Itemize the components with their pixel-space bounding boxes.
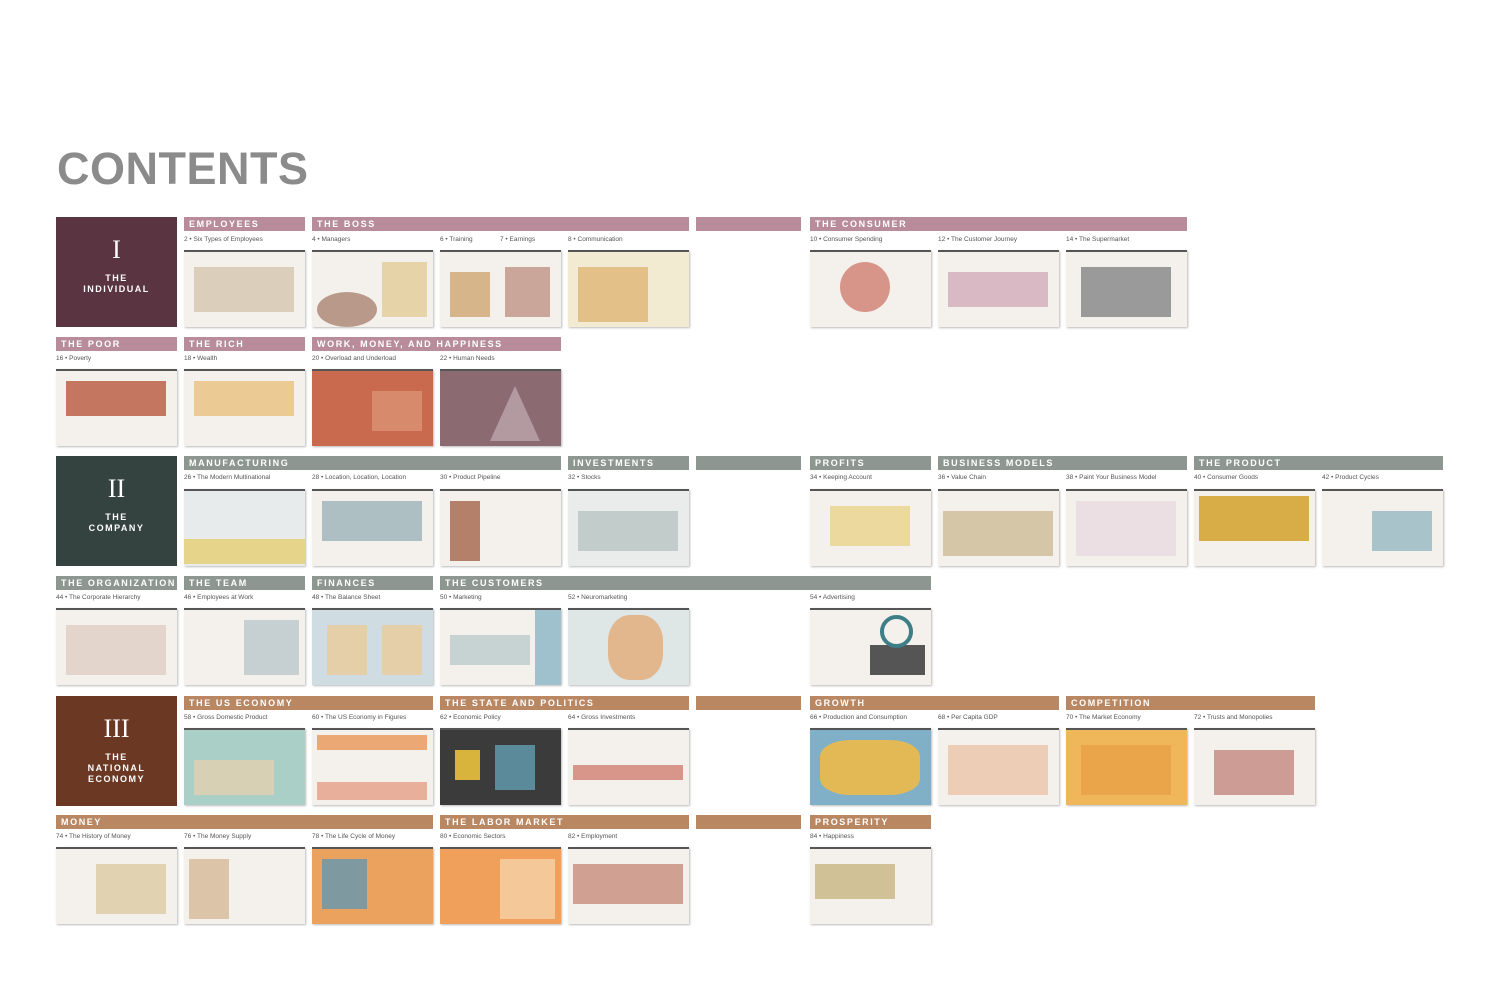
bar: investments	[568, 456, 689, 470]
bar: investments: INVESTMENTS	[573, 458, 655, 468]
section: III The National Economy	[56, 696, 177, 806]
bar: prosperity: PROSPERITY	[815, 817, 889, 827]
bar: the us economy: THE US ECONOMY	[189, 698, 293, 708]
bar: competition	[1066, 696, 1315, 710]
bar: blank	[696, 217, 801, 231]
thumbnails row 3	[184, 489, 1445, 568]
labels row 6: 78 • The Life Cycle of Money	[312, 833, 395, 840]
labels row 5: 58 • Gross Domestic Product	[184, 714, 268, 721]
labels row 3: 36 • Value Chain	[938, 474, 986, 481]
bar: the consumer	[810, 217, 1187, 231]
labels row 1: 4 • Managers	[312, 236, 350, 243]
labels row 3: 42 • Product Cycles	[1322, 474, 1379, 481]
labels row 5: 62 • Economic Policy	[440, 714, 501, 721]
bar: money	[56, 815, 433, 829]
bar: finances: FINANCES	[317, 578, 376, 588]
labels row 6	[56, 833, 854, 840]
labels row 3: 28 • Location, Location, Location	[312, 474, 406, 481]
labels row 6: 84 • Happiness	[810, 833, 854, 840]
section: III The National Economy: THE	[105, 752, 128, 762]
bar: growth: GROWTH	[815, 698, 866, 708]
section: III The National Economy: NATIONAL	[88, 763, 145, 773]
labels row 6: 74 • The History of Money	[56, 833, 131, 840]
bar: prosperity	[810, 815, 931, 829]
labels row 4: 48 • The Balance Sheet	[312, 594, 380, 601]
labels row 2	[56, 355, 495, 362]
labels row 6: 76 • The Money Supply	[184, 833, 251, 840]
labels row 1: 10 • Consumer Spending	[810, 236, 882, 243]
labels row 3: 32 • Stocks	[568, 474, 601, 481]
labels row 3: 26 • The Modern Multinational	[184, 474, 270, 481]
section: II The Company: II	[108, 474, 125, 503]
bar: blank	[696, 815, 801, 829]
thumbnails row 6	[56, 847, 933, 926]
bar: blank	[696, 456, 801, 470]
labels row 5: 64 • Gross Investments	[568, 714, 635, 721]
bar: the us economy	[184, 696, 433, 710]
section: II The Company	[56, 456, 177, 566]
labels row 1	[184, 236, 1130, 243]
labels row 5: 66 • Production and Consumption	[810, 714, 907, 721]
bar: the state and politics	[440, 696, 689, 710]
bar: blank	[696, 696, 801, 710]
section: I The Individual: THE	[105, 273, 128, 283]
labels row 1: 7 • Earnings	[500, 236, 535, 243]
labels row 5: 72 • Trusts and Monopolies	[1194, 714, 1273, 721]
labels row 4: 52 • Neuromarketing	[568, 594, 627, 601]
bar: work money happiness	[312, 337, 561, 351]
bar: the boss: THE BOSS	[317, 219, 376, 229]
labels row 5: 60 • The US Economy in Figures	[312, 714, 406, 721]
bar: the organization: THE ORGANIZATION	[61, 578, 176, 588]
bar: business models: BUSINESS MODELS	[943, 458, 1054, 468]
bar: the customers	[440, 576, 931, 590]
bar: manufacturing: MANUFACTURING	[189, 458, 289, 468]
labels row 4: 44 • The Corporate Hierarchy	[56, 594, 141, 601]
bar: money: MONEY	[61, 817, 102, 827]
bar: the organization	[56, 576, 177, 590]
bar: business models	[938, 456, 1187, 470]
labels row 5	[184, 714, 1273, 721]
bar: the team: THE TEAM	[189, 578, 248, 588]
section: II The Company: COMPANY	[89, 523, 144, 533]
labels row 2: 18 • Wealth	[184, 355, 217, 362]
bar: the consumer: THE CONSUMER	[815, 219, 907, 229]
title: CONTENTS	[57, 143, 308, 194]
bar: growth	[810, 696, 1059, 710]
section: I The Individual	[56, 217, 177, 327]
bar: the rich	[184, 337, 305, 351]
labels row 4: 50 • Marketing	[440, 594, 482, 601]
bar: the poor	[56, 337, 177, 351]
labels row 3: 34 • Keeping Account	[810, 474, 872, 481]
labels row 2: 16 • Poverty	[56, 355, 91, 362]
labels row 5: 70 • The Market Economy	[1066, 714, 1141, 721]
thumbnails row 4	[56, 608, 933, 687]
labels row 6: 82 • Employment	[568, 833, 617, 840]
thumbnails row 2	[56, 369, 563, 448]
labels row 3: 30 • Product Pipeline	[440, 474, 500, 481]
labels row 2: 22 • Human Needs	[440, 355, 495, 362]
labels row 3: 40 • Consumer Goods	[1194, 474, 1258, 481]
bar: the labor market	[440, 815, 689, 829]
bar: profits: PROFITS	[815, 458, 865, 468]
bar: manufacturing	[184, 456, 561, 470]
section: I The Individual: I	[112, 235, 121, 264]
labels row 4: 54 • Advertising	[810, 594, 855, 601]
section: II The Company: THE	[105, 512, 128, 522]
labels row 1: 8 • Communication	[568, 236, 623, 243]
labels row 4: 46 • Employees at Work	[184, 594, 253, 601]
labels row 3	[184, 474, 1379, 481]
labels row 3: 38 • Paint Your Business Model	[1066, 474, 1156, 481]
section: III The National Economy: III	[104, 714, 129, 743]
bar: profits	[810, 456, 931, 470]
bar: the team	[184, 576, 305, 590]
labels row 5: 68 • Per Capita GDP	[938, 714, 998, 721]
labels row 1: 6 • Training	[440, 236, 473, 243]
bar: the boss	[312, 217, 689, 231]
bar: the customers: THE CUSTOMERS	[445, 578, 544, 588]
thumbnails row 1	[184, 250, 1189, 329]
section: III The National Economy: ECONOMY	[88, 774, 145, 784]
section: I The Individual: INDIVIDUAL	[83, 284, 150, 294]
bar: finances	[312, 576, 433, 590]
bar: work money happiness: WORK, MONEY, AND HAPPINESS	[317, 339, 503, 349]
labels row 2: 20 • Overload and Underload	[312, 355, 396, 362]
labels row 4	[56, 594, 855, 601]
bar: competition: COMPETITION	[1071, 698, 1151, 708]
bar: employees	[184, 217, 305, 231]
labels row 6: 80 • Economic Sectors	[440, 833, 506, 840]
labels row 1: 14 • The Supermarket	[1066, 236, 1129, 243]
bar: the labor market: THE LABOR MARKET	[445, 817, 564, 827]
thumbnails row 5	[184, 728, 1317, 807]
bar: the rich: THE RICH	[189, 339, 244, 349]
labels row 1: 2 • Six Types of Employees	[184, 236, 263, 243]
bar: the product	[1194, 456, 1443, 470]
bar: the product: THE PRODUCT	[1199, 458, 1282, 468]
bar: the state and politics: THE STATE AND POLITICS	[445, 698, 595, 708]
bar: the poor: THE POOR	[61, 339, 121, 349]
bar: employees: EMPLOYEES	[189, 219, 259, 229]
labels row 1: 12 • The Customer Journey	[938, 236, 1017, 243]
